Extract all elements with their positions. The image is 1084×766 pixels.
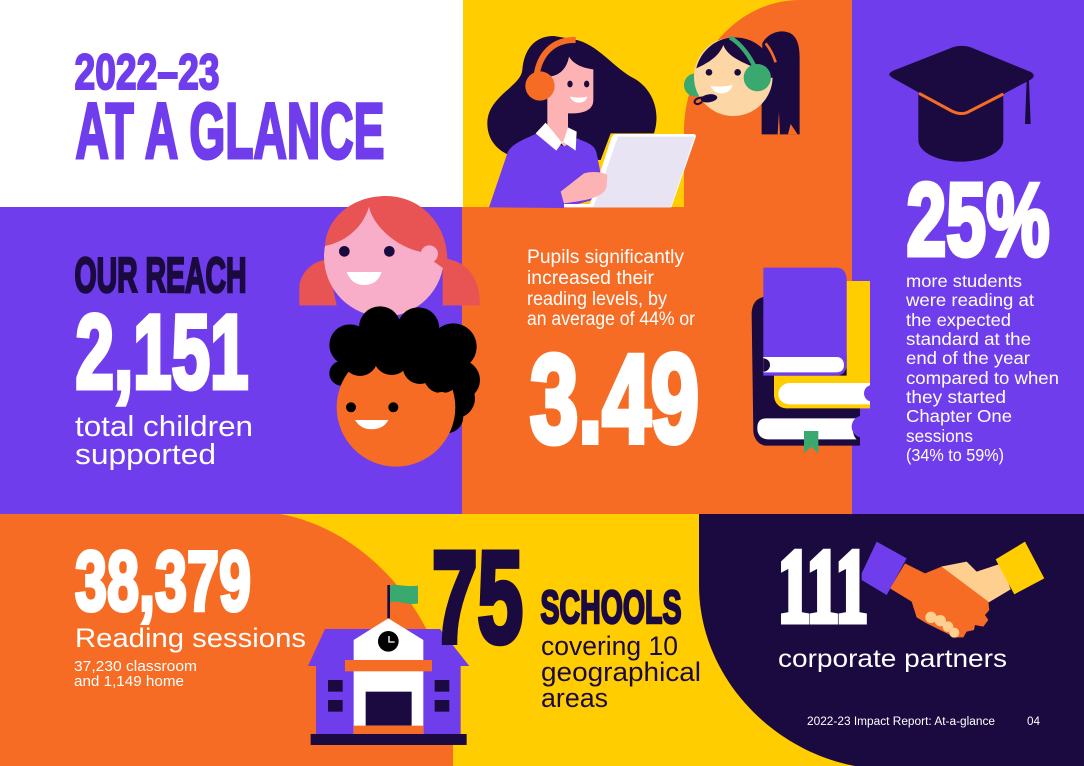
panel: yellow top (463, 0, 852, 207)
panel: 25 percent (852, 0, 1084, 514)
panel: our reach (0, 207, 462, 514)
caption: total children supported (75, 411, 253, 471)
icon: handshake (862, 542, 1044, 638)
text: students reading: Chapter One (906, 406, 1012, 426)
text: students reading: end of the year (906, 348, 1030, 368)
text: students reading (905, 271, 1059, 465)
panel: yellow bottom (0, 514, 1084, 766)
footer: 2022-23 Impact Report: At-a-glance (807, 716, 995, 728)
caption: classroom and home: and 1,149 home (74, 673, 184, 690)
icon: boy with curly hair (329, 306, 480, 467)
caption: geographical areas: geographical (541, 657, 701, 687)
title: AT A GLANCE (76, 86, 384, 175)
icon: stack of books (752, 268, 881, 453)
caption: reading sessions: Reading sessions (75, 623, 306, 653)
panel: orange top curve (684, 0, 852, 208)
text: students reading: they started (906, 387, 1006, 407)
text: students reading: more students (906, 271, 1022, 291)
stat: 111 partners: 111 (778, 529, 868, 644)
panel: orange sessions (0, 514, 453, 766)
text: students reading: (34% to 59%) (906, 445, 1004, 465)
caption: classroom and home: 37,230 classroom (74, 658, 197, 675)
text: reading levels (527, 247, 696, 330)
stat: 3.49: 3.49 (530, 330, 699, 469)
caption: geographical areas: covering 10 (541, 631, 678, 661)
footer: 04 (1027, 716, 1041, 728)
icon: graduation cap (889, 46, 1034, 162)
caption: total children supported: total children (75, 411, 253, 443)
panel: corporate partners (699, 514, 1084, 766)
caption: geographical areas (541, 631, 701, 713)
text: students reading: the expected (906, 310, 1011, 330)
stat: reading sessions: 38,379 (75, 534, 251, 628)
icon: girl with pigtails (299, 196, 480, 317)
text: reading levels: increased their (527, 268, 655, 289)
text: students reading: were reading at (905, 290, 1034, 310)
text: reading levels: Pupils significantly (527, 247, 684, 268)
text: students reading: compared to when (906, 368, 1059, 388)
icon: woman with headset and tablet (487, 36, 696, 208)
title: 2022–23 (74, 44, 220, 100)
text: reading levels: an average of 44% or (527, 309, 696, 330)
caption: geographical areas: areas (541, 683, 608, 713)
panel: reading levels (462, 207, 852, 514)
icon: girl with green headset (684, 31, 800, 134)
text: students reading: sessions (906, 426, 973, 446)
panel: white title background (0, 0, 463, 207)
stat: total children: 2,151 (76, 294, 248, 411)
text: reading levels: reading levels, by (527, 289, 667, 310)
caption: total children supported: supported (75, 439, 216, 471)
caption: classroom and home (74, 658, 197, 690)
icon: school building (308, 585, 469, 745)
text: students reading: standard at the (906, 329, 1031, 349)
our reach heading: OUR REACH (74, 249, 246, 303)
heading: schools: SCHOOLS (540, 581, 682, 633)
caption: corporate partners: corporate partners (778, 645, 1007, 673)
title (74, 44, 384, 175)
stat: 75 schools: 75 (432, 524, 523, 670)
